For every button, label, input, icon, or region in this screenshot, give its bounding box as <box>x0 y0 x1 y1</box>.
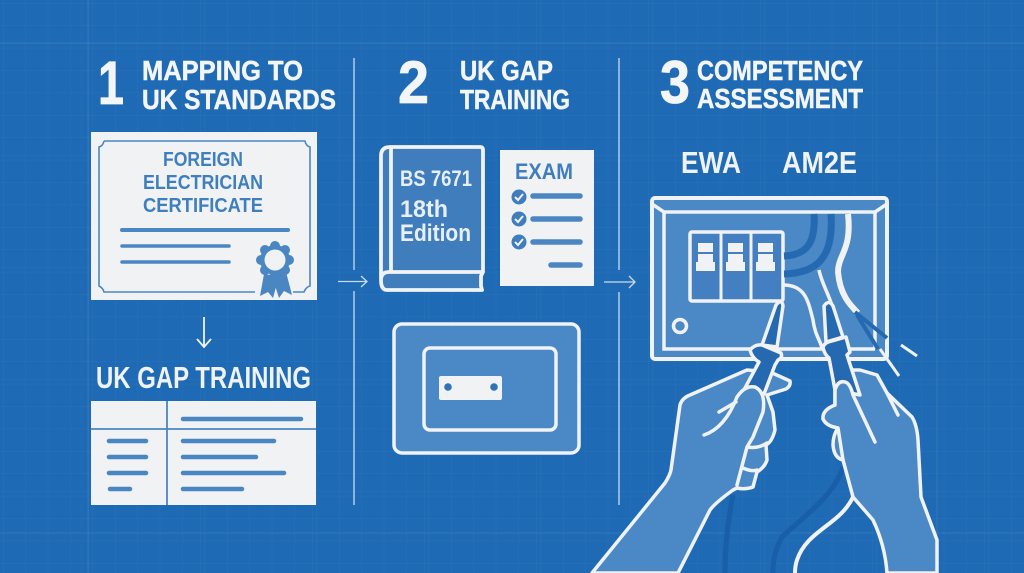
book: BS 7671 18th Edition: BS 7671 <box>400 166 472 191</box>
book: BS 7671 18th Edition <box>381 147 483 290</box>
foreign electrician certificate: ELECTRICIAN <box>143 172 263 194</box>
step 2 heading: UK GAP <box>460 55 553 86</box>
icon: checklist ticks <box>512 190 526 250</box>
step 1 number: 1 <box>98 49 124 117</box>
socket icon <box>394 324 579 453</box>
UK gap training label: UK GAP TRAINING <box>96 360 311 395</box>
right probe <box>823 302 860 395</box>
book: BS 7671 18th Edition: Edition <box>400 220 471 247</box>
step 1 heading: MAPPING TO <box>142 55 303 86</box>
step 3 number: 3 <box>660 49 690 116</box>
breaker block <box>690 232 783 301</box>
step 2 heading: TRAINING <box>460 84 570 115</box>
wires <box>783 214 917 376</box>
ring terminal <box>674 320 686 332</box>
EWA label: EWA <box>681 145 741 180</box>
divider and arrow between steps 1 and 2 <box>338 58 367 505</box>
AM2E label: AM2E <box>782 145 857 180</box>
panel: step 2 UK gap training <box>381 49 594 453</box>
step 3 heading <box>697 55 863 114</box>
step 2 heading <box>460 55 570 115</box>
step 3 heading: ASSESSMENT <box>697 83 863 114</box>
divider and arrow between steps 2 and 3 <box>604 58 635 505</box>
icon: rosette seal <box>256 241 294 298</box>
foreign electrician certificate <box>91 132 317 300</box>
step 2 number: 2 <box>398 49 429 116</box>
consumer unit <box>652 198 917 376</box>
step 1 heading <box>142 55 336 115</box>
book: BS 7671 18th Edition: 18th <box>400 196 448 223</box>
panel: step 3 competency assessment <box>592 49 937 573</box>
background test leads <box>725 467 843 573</box>
right hand holding probe <box>823 302 937 573</box>
arrow: down <box>197 317 211 347</box>
white test lead <box>795 497 853 573</box>
exam sheet: EXAM <box>515 159 573 184</box>
step 3 heading: COMPETENCY <box>697 55 863 86</box>
step 1 heading: UK STANDARDS <box>142 84 336 115</box>
panel: step 1 mapping to UK standards <box>91 49 336 505</box>
foreign electrician certificate: FOREIGN <box>163 149 243 171</box>
foreign electrician certificate: CERTIFICATE <box>143 195 263 217</box>
exam sheet <box>500 150 594 286</box>
left hand holding probe <box>592 302 790 573</box>
left probe <box>745 302 783 394</box>
gap analysis table <box>91 401 316 505</box>
